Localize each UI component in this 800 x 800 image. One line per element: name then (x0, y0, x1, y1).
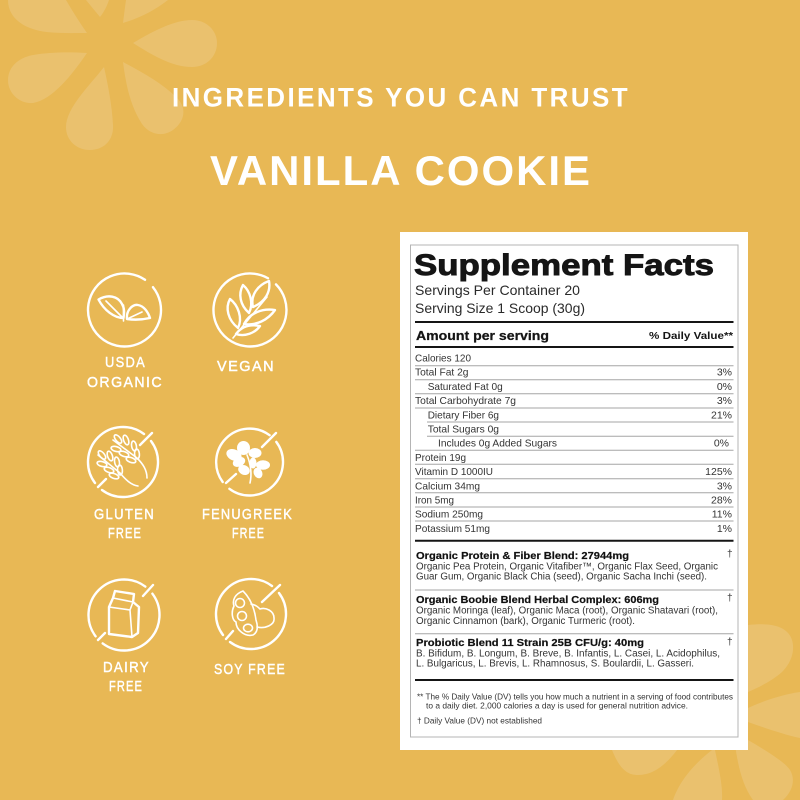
serving size: Serving Size 1 Scoop (30g) (415, 300, 585, 316)
row: vitamin d: Vitamin D 1000IU (415, 466, 493, 478)
blend: probiotic: L. Bulgaricus, L. Brevis, L. Rhamnosus, S. Boulardii, L. Gasseri. (416, 659, 694, 670)
footnote: daily value: to a daily diet. 2,000 calories a day is used for general nutrition advice. (426, 700, 688, 710)
row: iron: 28% (711, 494, 732, 506)
row: added sugars: 0% (714, 438, 729, 450)
row: potassium: 1% (717, 523, 732, 535)
blend: organic protein and fiber: Organic Pea Protein, Organic Vitafiber™, Organic Flax Seed, Organic (416, 562, 718, 572)
icon: leaves (88, 273, 161, 346)
row: saturated fat: Saturated Fat 0g (428, 381, 503, 393)
servings per container: Servings Per Container 20 (415, 282, 580, 298)
row: total sugars: Total Sugars 0g (428, 424, 499, 436)
row: calcium (415, 480, 732, 492)
label: gluten free: FREE (108, 525, 142, 542)
heading: supplement facts: Supplement Facts (414, 249, 714, 282)
row: total carbohydrate: Total Carbohydrate 7g (415, 395, 516, 407)
label: gluten free (94, 506, 155, 542)
row: added sugars (438, 438, 729, 450)
badge: usda organic (87, 273, 163, 391)
panel: supplement facts (400, 232, 748, 750)
icon: crossed soybeans (216, 579, 286, 649)
blend: organic protein and fiber: Guar Gum, Organic Black Chia (seed), Organic Sacha Inchi (seed). (416, 572, 707, 582)
amount per serving header: Amount per serving (416, 329, 549, 343)
row: saturated fat (428, 381, 732, 393)
row: total fat: Total Fat 2g (415, 367, 469, 379)
label: fenugreek free: FENUGREEK (202, 506, 293, 523)
decorative flower: bottom right (612, 624, 800, 800)
row: sodium: Sodium 250mg (415, 509, 483, 521)
row: dietary fiber (428, 409, 732, 421)
row: iron (415, 494, 732, 506)
footnote: daily value: ** The % Daily Value (DV) tells you how much a nutrient in a serving of food contributes (417, 691, 733, 701)
row: calories: Calories 120 (415, 352, 471, 364)
label: usda organic: ORGANIC (87, 374, 163, 391)
label: dairy free (103, 659, 150, 695)
blend: organic protein and fiber: Organic Protein & Fiber Blend: 27944mg (416, 550, 629, 562)
footnote: dagger: † Daily Value (DV) not established (417, 716, 542, 726)
row: sodium (415, 509, 732, 521)
blend: organic boobie herbal complex: Organic Moringa (leaf), Organic Maca (root), Organic Shatavari (root), (416, 606, 718, 616)
row: calcium: Calcium 34mg (415, 480, 480, 492)
badge: dairy free (88, 579, 159, 695)
nutrient rows (415, 352, 734, 535)
row: added sugars: Includes 0g Added Sugars (438, 438, 557, 450)
label: fenugreek free (202, 506, 293, 542)
row: saturated fat: 0% (717, 381, 732, 393)
blend: probiotic: Probiotic Blend 11 Strain 25B CFU/g: 40mg (416, 637, 644, 649)
blend: probiotic: B. Bifidum, B. Longum, B. Breve, B. Infantis, L. Casei, L. Acidophilus, (416, 649, 720, 660)
blend: organic boobie herbal complex (416, 593, 733, 627)
badge: soy free (214, 579, 286, 678)
blend: probiotic: † (727, 637, 733, 648)
badge: gluten free (88, 427, 158, 542)
row: potassium: Potassium 51mg (415, 523, 490, 535)
heading: vanilla cookie: VANILLA COOKIE (210, 147, 592, 194)
label: usda organic: USDA (105, 354, 146, 371)
icon: crossed milk carton (88, 579, 159, 650)
row: total carbohydrate: 3% (717, 395, 732, 407)
icon: crossed wheat (88, 427, 158, 497)
icon: sprig (213, 273, 286, 346)
row: vitamin d: 125% (705, 466, 732, 478)
row: total fat: 3% (717, 367, 732, 379)
blend: organic protein and fiber (416, 549, 733, 582)
decorative flower: top left (8, 0, 217, 150)
blend: organic boobie herbal complex: † (727, 593, 733, 604)
blend: probiotic (416, 637, 733, 670)
row: sodium: 11% (712, 509, 732, 521)
row: vitamin d (415, 466, 732, 478)
row: total fat (415, 367, 732, 379)
badge: fenugreek free (202, 429, 293, 542)
blend: organic boobie herbal complex: Organic Boobie Blend Herbal Complex: 606mg (416, 594, 659, 606)
daily value header: % Daily Value** (649, 331, 733, 342)
title: ingredients you can trust: INGREDIENTS YOU CAN TRUST (172, 82, 630, 112)
label: vegan: VEGAN (217, 358, 275, 375)
row: protein: Protein 19g (415, 452, 466, 464)
row: iron: Iron 5mg (415, 494, 454, 506)
row: potassium (415, 523, 732, 535)
blend: organic boobie herbal complex: Organic Cinnamon (bark), Organic Turmeric (root). (416, 616, 635, 627)
label: fenugreek free: FREE (232, 525, 265, 542)
blend: organic protein and fiber: † (727, 549, 733, 560)
icon: crossed fenugreek (216, 429, 283, 496)
label: dairy free: FREE (109, 678, 143, 695)
label: soy free: SOY FREE (214, 661, 286, 678)
row: dietary fiber: Dietary Fiber 6g (428, 409, 499, 421)
row: total carbohydrate (415, 395, 732, 407)
badge: vegan (213, 273, 286, 375)
label: dairy free: DAIRY (103, 659, 150, 676)
label: usda organic (87, 354, 163, 391)
label: gluten free: GLUTEN (94, 506, 155, 523)
row: dietary fiber: 21% (711, 409, 732, 421)
row: calcium: 3% (717, 480, 732, 492)
footnote: daily value (417, 691, 733, 710)
